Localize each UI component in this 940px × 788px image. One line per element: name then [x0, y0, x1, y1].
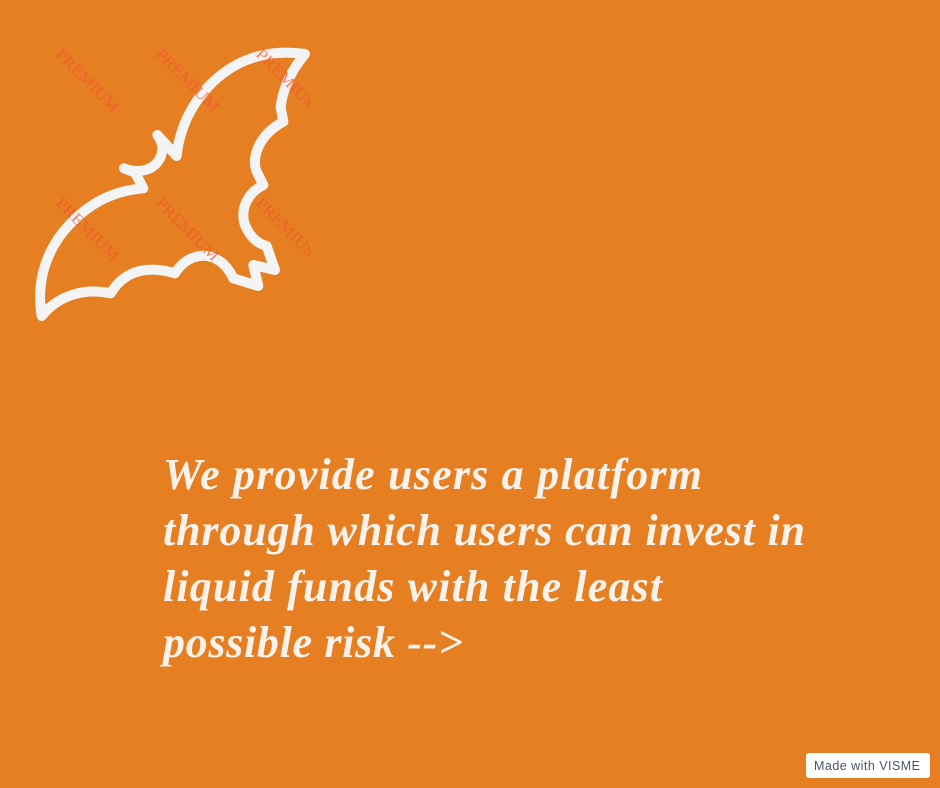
watermarks: PREMIUM: PREMIUM [52, 46, 122, 116]
text block: main statement: liquid funds with the least [163, 562, 664, 611]
badge: made with Visme [806, 753, 930, 778]
watermarks: PREMIUM: PREMIUM [252, 195, 322, 265]
watermarks: PREMIUM: PREMIUM [152, 195, 222, 265]
watermarks: PREMIUM [52, 46, 322, 265]
text block: main statement: through which users can invest in [163, 506, 805, 555]
icon: bat outline [40, 53, 305, 316]
text block: main statement: possible risk --> [159, 618, 463, 667]
text block: main statement: We provide users a platform [163, 450, 702, 499]
text block: main statement [159, 450, 805, 667]
badge: made with Visme: Made with VISME [814, 759, 920, 773]
watermarks: PREMIUM: PREMIUM [152, 46, 222, 116]
watermarks: PREMIUM: PREMIUM [52, 195, 122, 265]
watermarks: PREMIUM: PREMIUM [252, 46, 322, 116]
